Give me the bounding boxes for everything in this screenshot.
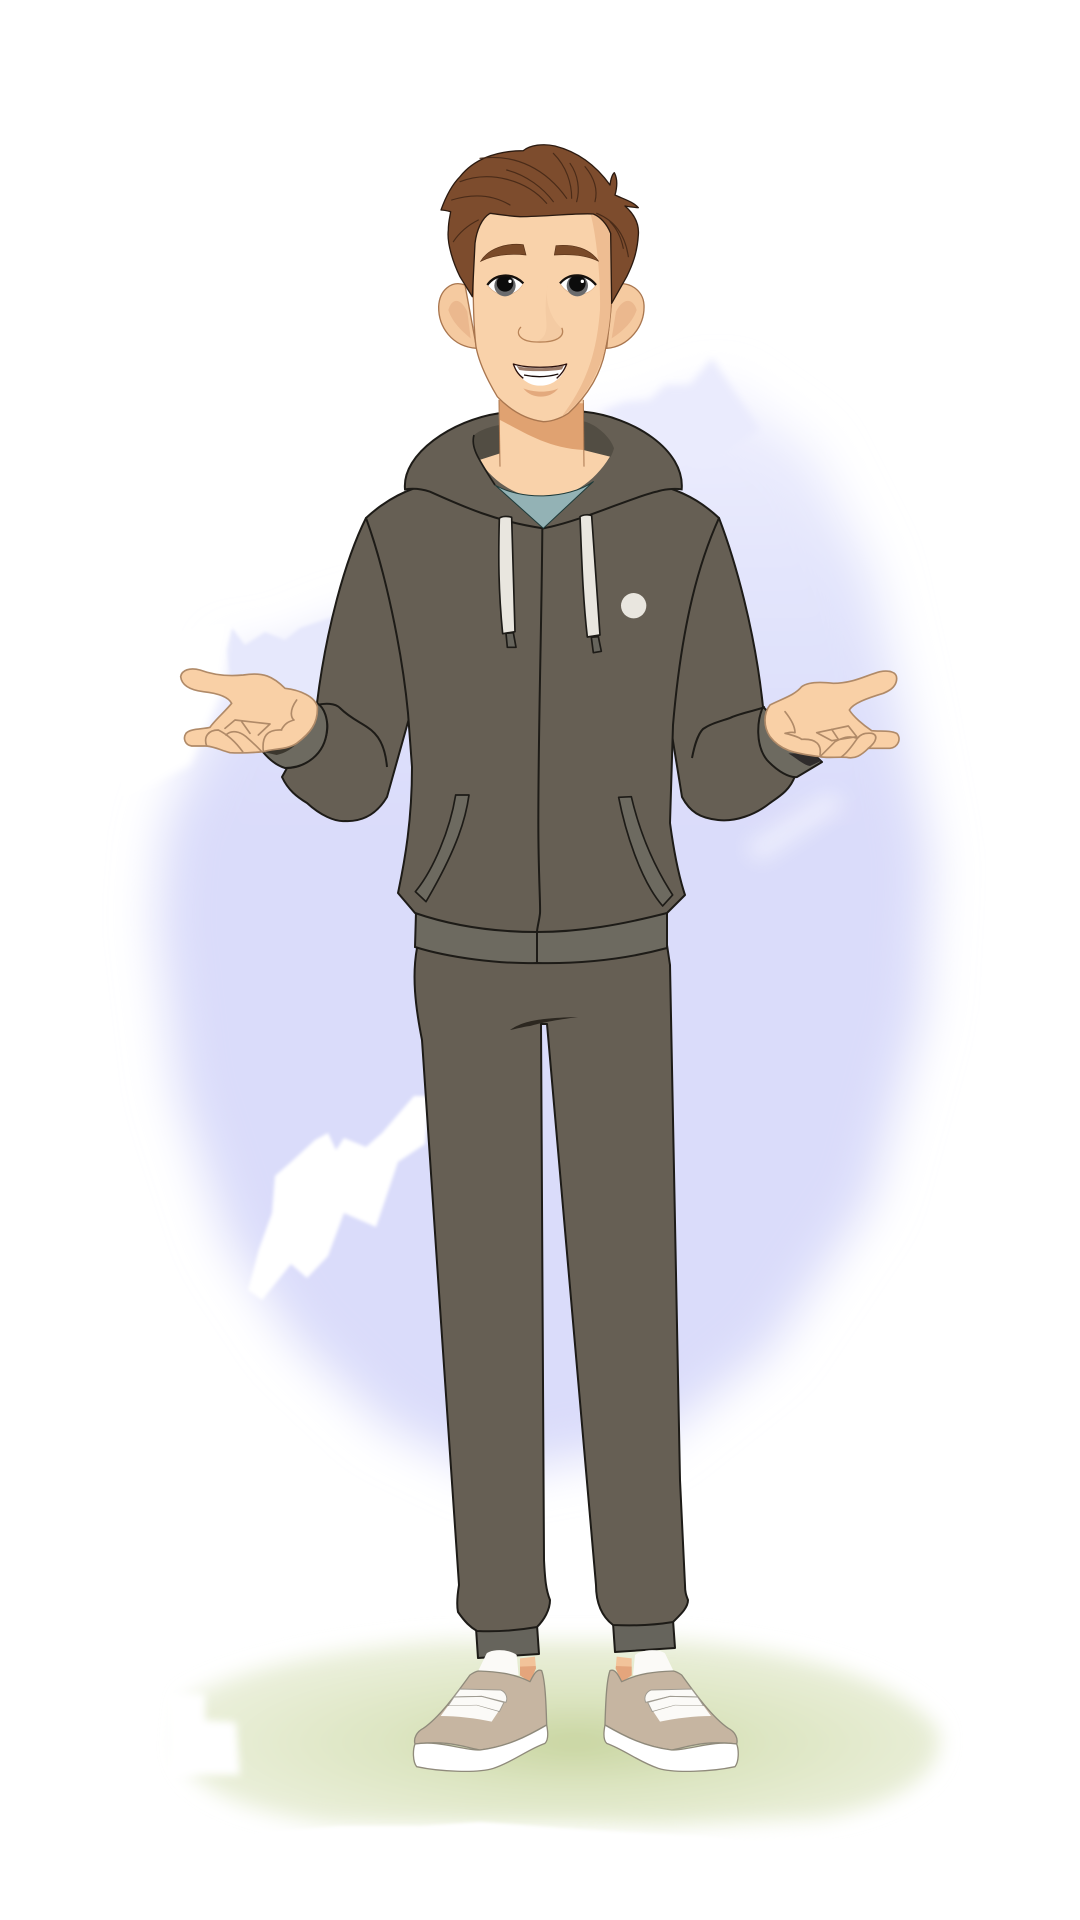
right drawstring	[580, 515, 601, 653]
zipper	[537, 528, 542, 932]
hair strands	[452, 153, 628, 257]
inner ears	[448, 301, 637, 338]
neck shadow	[499, 400, 584, 450]
neck lines	[499, 400, 584, 467]
hair	[441, 145, 638, 303]
hoodie details	[415, 515, 673, 932]
right palm	[765, 671, 899, 758]
left hand	[181, 669, 327, 768]
left palm	[181, 669, 317, 753]
left cuff	[263, 703, 327, 768]
hood	[405, 412, 682, 528]
face shading	[562, 207, 611, 417]
left drawstring	[499, 516, 516, 647]
ears	[439, 284, 644, 348]
hood interior	[473, 422, 614, 462]
hood lines	[473, 435, 495, 485]
ground: green watercolor patch	[168, 1640, 939, 1880]
left eye	[487, 275, 523, 296]
left cuff shadow	[262, 742, 298, 755]
eyebrows	[481, 244, 599, 261]
head	[439, 145, 644, 422]
t-shirt	[495, 482, 593, 528]
left finger lines	[206, 700, 297, 752]
trousers	[415, 945, 688, 1631]
chest skin	[479, 397, 610, 498]
hoodie torso	[366, 488, 719, 932]
face	[473, 200, 612, 422]
hoodie hem band	[415, 912, 667, 963]
background: lilac watercolor blob	[158, 358, 930, 1475]
right eye	[560, 275, 596, 296]
right shoe	[604, 1650, 738, 1771]
hood, neck and t-shirt	[405, 397, 682, 528]
left pocket	[415, 795, 469, 902]
ankle cuffs	[476, 1620, 675, 1658]
right pocket	[619, 797, 673, 906]
right sleeve	[650, 518, 795, 820]
sleeve creases	[317, 704, 765, 767]
right cuff	[758, 707, 822, 777]
badge	[621, 593, 646, 618]
right finger lines	[785, 712, 876, 757]
mouth	[513, 364, 567, 397]
right hand	[758, 671, 899, 777]
hoodie hem seam	[536, 932, 538, 963]
background: white brush strokes	[120, 622, 845, 1300]
nose	[518, 283, 563, 342]
right cuff shadow	[788, 753, 822, 766]
left shoe	[413, 1650, 548, 1771]
left sleeve	[282, 518, 430, 821]
trousers crease	[510, 1017, 578, 1030]
